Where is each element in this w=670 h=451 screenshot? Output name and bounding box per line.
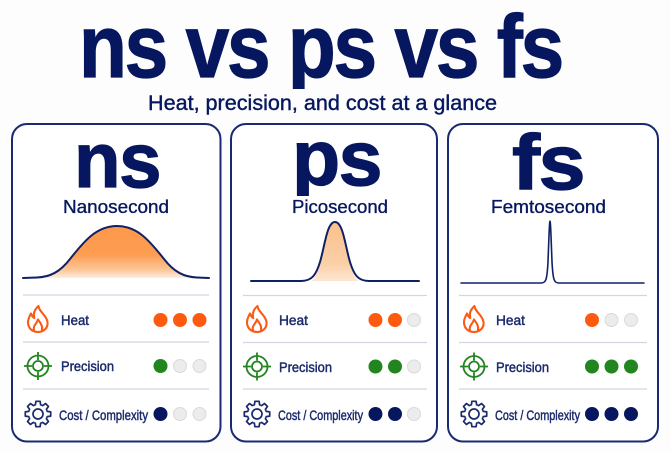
label: Precision: Precision xyxy=(496,359,549,375)
rating: 3 of 3 xyxy=(585,360,638,374)
panel: femtosecond xyxy=(448,118,658,442)
row: heat xyxy=(464,306,638,332)
row: heat xyxy=(28,306,206,332)
label: Heat: Heat xyxy=(496,312,525,328)
rating: 3 of 3 xyxy=(585,407,638,421)
rating: 3 of 3 xyxy=(154,313,206,327)
chart: narrow pulse xyxy=(461,221,644,283)
row: precision xyxy=(460,352,638,380)
label: Cost / Complexity: Cost / Complexity xyxy=(495,407,580,423)
row: precision xyxy=(24,352,206,380)
rating: 2 of 3 xyxy=(368,313,420,327)
chart: wide pulse xyxy=(23,226,209,278)
panel: picosecond xyxy=(231,114,437,442)
icon: flame xyxy=(28,306,48,332)
row: heat xyxy=(247,306,420,332)
rating: 2 of 3 xyxy=(368,360,420,374)
label: Femtosecond: Femtosecond xyxy=(491,197,606,217)
row: precision xyxy=(243,352,420,380)
row: cost xyxy=(461,401,638,427)
label: Cost / Complexity: Cost / Complexity xyxy=(278,407,363,423)
icon: target xyxy=(24,352,52,380)
row: cost xyxy=(25,401,206,427)
label: Precision: Precision xyxy=(279,359,332,375)
icon: target xyxy=(460,352,488,380)
label: Heat: Heat xyxy=(61,312,89,328)
rating: 1 of 3 xyxy=(154,407,206,421)
rating: 1 of 3 xyxy=(585,313,638,327)
label: Picosecond: Picosecond xyxy=(292,197,388,217)
panel: nanosecond xyxy=(12,116,220,442)
heading: ns: ns xyxy=(74,116,160,204)
icon: flame xyxy=(464,306,484,332)
row: cost xyxy=(244,401,420,427)
rating: 1 of 3 xyxy=(154,359,206,373)
rating: 2 of 3 xyxy=(368,407,420,421)
label: Heat: Heat xyxy=(279,312,308,328)
icon: gear xyxy=(25,401,51,427)
icon: gear xyxy=(461,401,487,427)
heading: fs: fs xyxy=(512,118,584,206)
label: Cost / Complexity: Cost / Complexity xyxy=(59,407,148,423)
label: Precision: Precision xyxy=(61,358,114,374)
heading: ps: ps xyxy=(292,114,381,202)
label: Nanosecond: Nanosecond xyxy=(63,197,169,217)
icon: gear xyxy=(244,401,270,427)
icon: target xyxy=(243,352,271,380)
chart: medium pulse xyxy=(251,222,419,281)
icon: flame xyxy=(247,306,267,332)
subtitle: Heat, precision, and cost at a glance xyxy=(148,92,497,115)
